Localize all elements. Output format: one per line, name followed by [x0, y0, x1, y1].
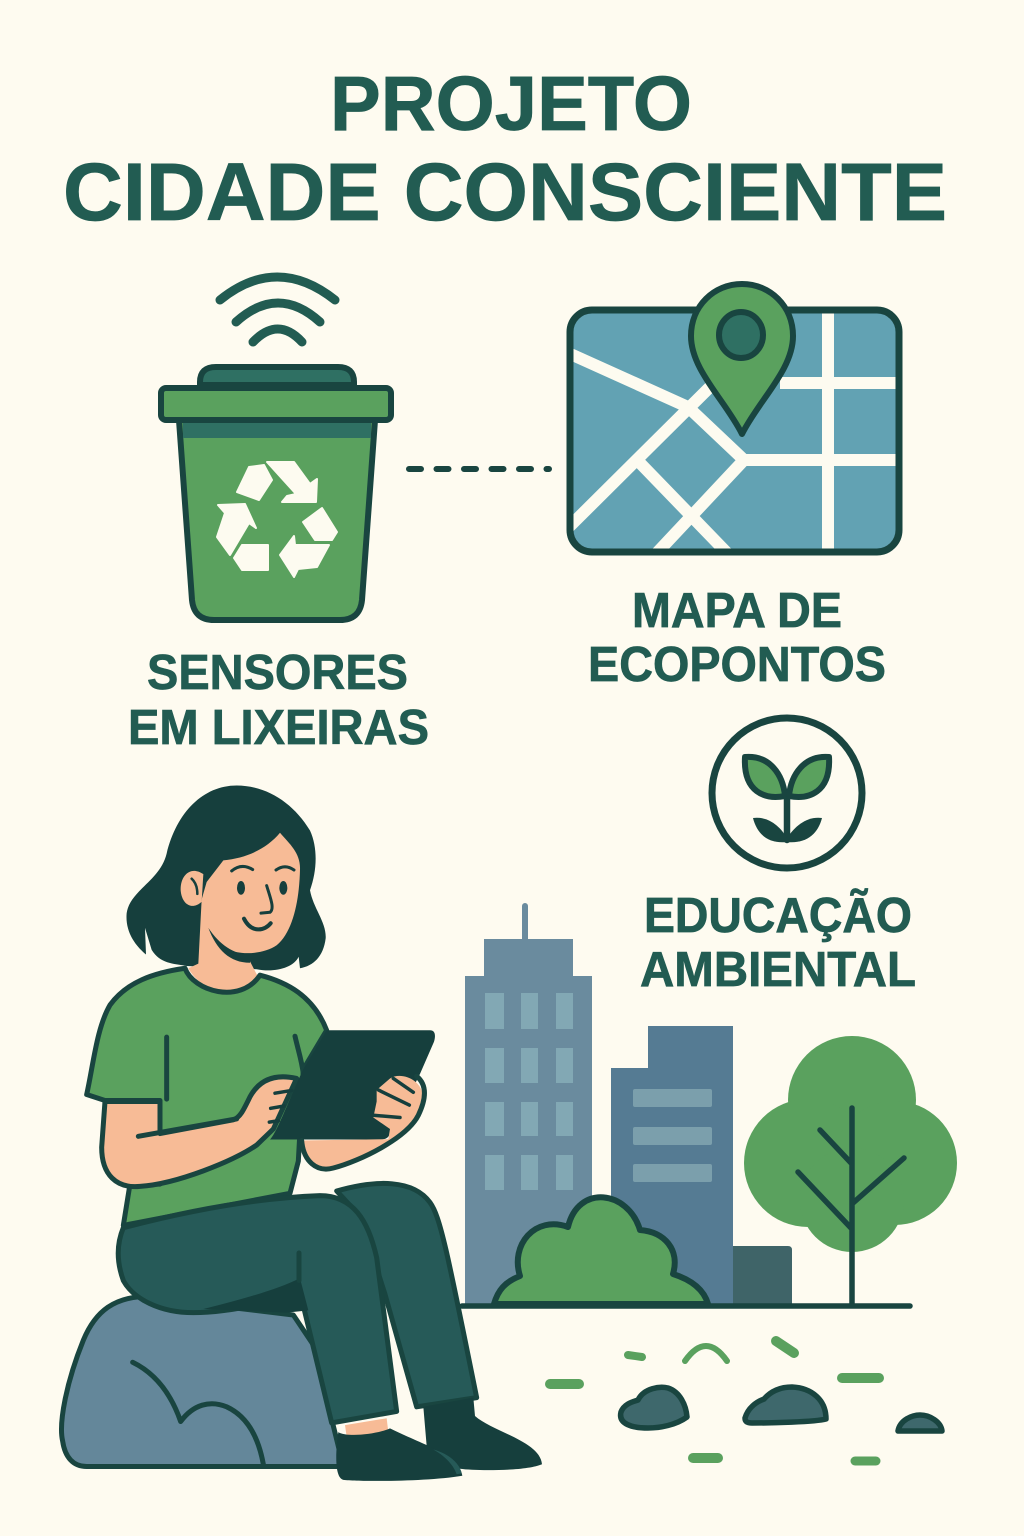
left hand fingers	[269, 1090, 292, 1122]
right hand and forearm	[302, 1076, 424, 1169]
building: small block	[733, 1246, 792, 1305]
building: tall tower	[465, 903, 592, 1305]
front leg	[118, 1196, 397, 1423]
label: sensores em lixeiras: SENSORES	[147, 646, 408, 700]
title	[63, 61, 947, 238]
icon: recycling symbol	[217, 462, 337, 577]
label: mapa de ecopontos: MAPA DE	[632, 584, 842, 638]
nose	[261, 886, 272, 913]
icon: smart recycling bin	[161, 367, 391, 620]
face and neck	[181, 833, 300, 993]
ground grass marks	[550, 1341, 879, 1461]
ear	[181, 871, 203, 906]
ground stones	[621, 1387, 942, 1431]
dashed connector	[409, 466, 549, 472]
icon: wifi signal	[220, 277, 335, 342]
ankle	[345, 1418, 388, 1437]
rock	[62, 1297, 343, 1467]
title: PROJETO	[330, 61, 692, 147]
tablet	[270, 1030, 435, 1140]
title: CIDADE CONSCIENTE	[63, 147, 947, 238]
icon: map with location pin	[566, 284, 905, 556]
label: mapa de ecopontos: ECOPONTOS	[588, 638, 886, 692]
hair	[126, 786, 326, 970]
label: educação ambiental: EDUCAÇÃO	[644, 889, 912, 943]
shirt	[87, 968, 327, 1225]
tree	[744, 1036, 957, 1305]
smile	[244, 919, 271, 929]
person: woman seated on rock using tablet	[62, 786, 542, 1481]
icon: location pin	[691, 284, 793, 434]
label: sensores em lixeiras	[128, 646, 429, 755]
shoes	[336, 1398, 542, 1481]
label: sensores em lixeiras: EM LIXEIRAS	[128, 701, 429, 755]
building: mid-rise	[611, 1026, 733, 1305]
label: educação ambiental: AMBIENTAL	[640, 943, 916, 997]
left arm	[102, 1077, 297, 1187]
label: educação ambiental	[640, 889, 916, 997]
label: mapa de ecopontos	[588, 584, 886, 692]
back leg	[337, 1183, 477, 1407]
icon: sprout in circle	[712, 718, 862, 868]
ground line	[462, 1303, 910, 1309]
bush	[494, 1197, 708, 1304]
eyes	[237, 881, 245, 895]
